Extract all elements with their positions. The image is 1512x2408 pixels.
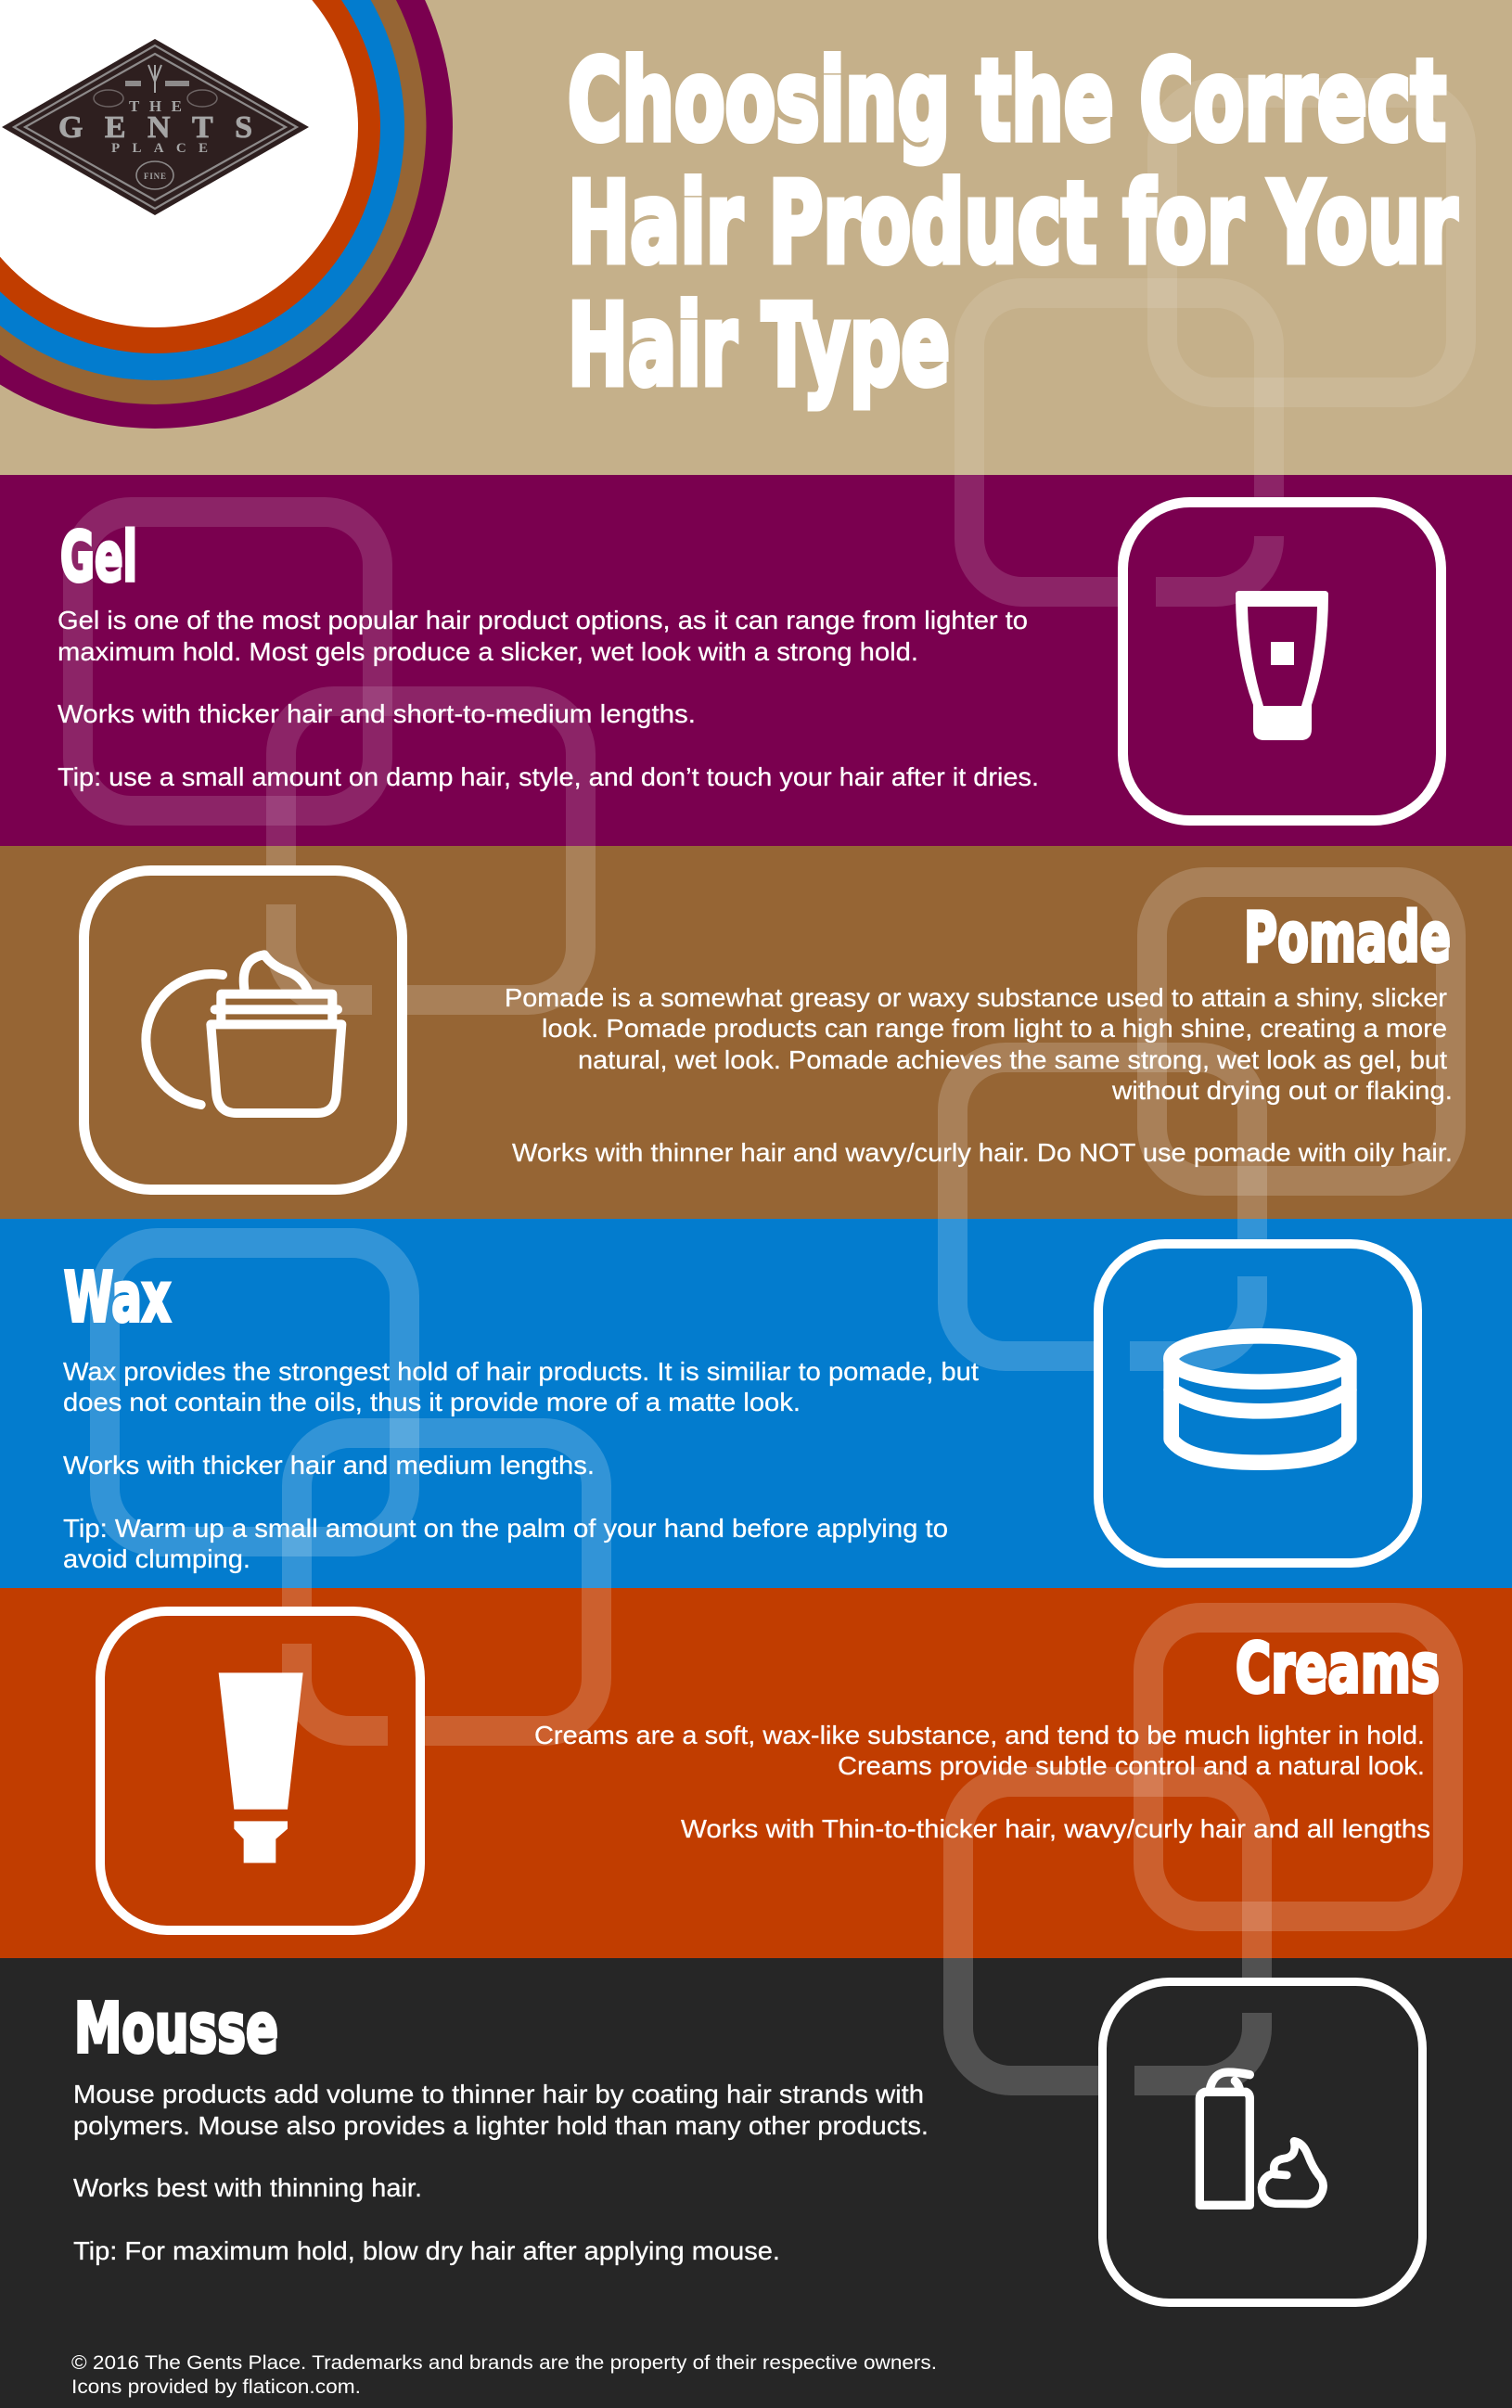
text block: creams description: Creams provide subtle control and a natural look.	[838, 1751, 1425, 1780]
logo: The Gents Place diamond: FINE	[144, 172, 166, 181]
heading: mousse: Mousse	[74, 1989, 278, 2069]
icon: cream tube	[100, 1611, 420, 1930]
text block: gel description: maximum hold. Most gels produce a slicker, wet look with a strong hold.	[58, 637, 918, 666]
heading: wax: Wax	[64, 1258, 171, 1338]
text block: mousse description: Works best with thinning hair.	[73, 2173, 422, 2202]
logo: The Gents Place diamond: GENTS	[58, 110, 252, 145]
logo: The Gents Place diamond: PLACE	[111, 141, 208, 156]
text block: wax description: Works with thicker hair and medium lengths.	[63, 1451, 595, 1479]
footer credits	[71, 2351, 937, 2398]
text block: pomade description: natural, wet look. Pomade achieves the same strong, wet look as gel, but	[578, 1045, 1447, 1074]
icon: wax tin	[1098, 1244, 1417, 1563]
text block: gel description: Works with thicker hair and short-to-medium lengths.	[58, 699, 696, 728]
text block: gel description: Gel is one of the most popular hair product options, as it can range from lighter to	[58, 606, 1028, 634]
text block: wax description: avoid clumping.	[63, 1544, 250, 1573]
header panel	[0, 0, 1457, 429]
text block: pomade description: Pomade is a somewhat greasy or waxy substance used to attain a shiny, slicker	[505, 983, 1447, 1012]
text block: pomade description	[505, 983, 1453, 1167]
text block: gel description: Tip: use a small amount on damp hair, style, and don’t touch your hair after it dries.	[58, 762, 1039, 791]
logo: The Gents Place diamond	[2, 39, 309, 215]
footer credits: © 2016 The Gents Place. Trademarks and brands are the property of their respective owners.	[71, 2351, 937, 2374]
panel: gel	[0, 475, 1512, 846]
concentric circle badge	[0, 0, 453, 429]
panel: wax	[0, 1219, 1512, 1588]
text block: gel description	[58, 606, 1039, 791]
text block: creams description	[534, 1721, 1430, 1843]
text block: pomade description: Works with thinner hair and wavy/curly hair. Do NOT use pomade with oily hair.	[512, 1138, 1453, 1167]
panel: creams	[0, 1588, 1512, 1958]
text block: creams description: Creams are a soft, wax-like substance, and tend to be much lighter in hold.	[534, 1721, 1425, 1749]
heading: gel: Gel	[60, 518, 137, 597]
icon: gel tube	[1122, 503, 1442, 820]
text block: mousse description: polymers. Mouse also provides a lighter hold than many other products.	[73, 2111, 929, 2140]
text block: mousse description: Mouse products add volume to thinner hair by coating hair strands with	[73, 2080, 924, 2108]
text block: pomade description: look. Pomade products can range from light to a high shine, creating a more	[542, 1014, 1447, 1043]
text block: creams description: Works with Thin-to-thicker hair, wavy/curly hair and all lengths	[681, 1814, 1430, 1843]
title: Hair Type	[568, 282, 950, 411]
text block: wax description: Wax provides the strongest hold of hair products. It is similiar to pomade, but	[63, 1357, 979, 1386]
footer credits: Icons provided by flaticon.com.	[71, 2376, 361, 2398]
logo: The Gents Place diamond: THE	[129, 97, 182, 115]
panel: pomade	[0, 846, 1512, 1219]
title	[568, 37, 1457, 411]
text block: mousse description	[73, 2080, 929, 2265]
text block: wax description	[63, 1357, 979, 1573]
icon: mousse can and foam	[1102, 1981, 1423, 2302]
text block: pomade description: without drying out or flaking.	[1111, 1076, 1453, 1105]
panel: mousse	[0, 1958, 1512, 2408]
text block: mousse description: Tip: For maximum hold, blow dry hair after applying mouse.	[73, 2236, 780, 2265]
text block: wax description: does not contain the oils, thus it provide more of a matte look.	[63, 1388, 801, 1416]
text block: wax description: Tip: Warm up a small amount on the palm of your hand before applying to	[63, 1514, 948, 1543]
icon: pomade jar	[83, 870, 403, 1189]
